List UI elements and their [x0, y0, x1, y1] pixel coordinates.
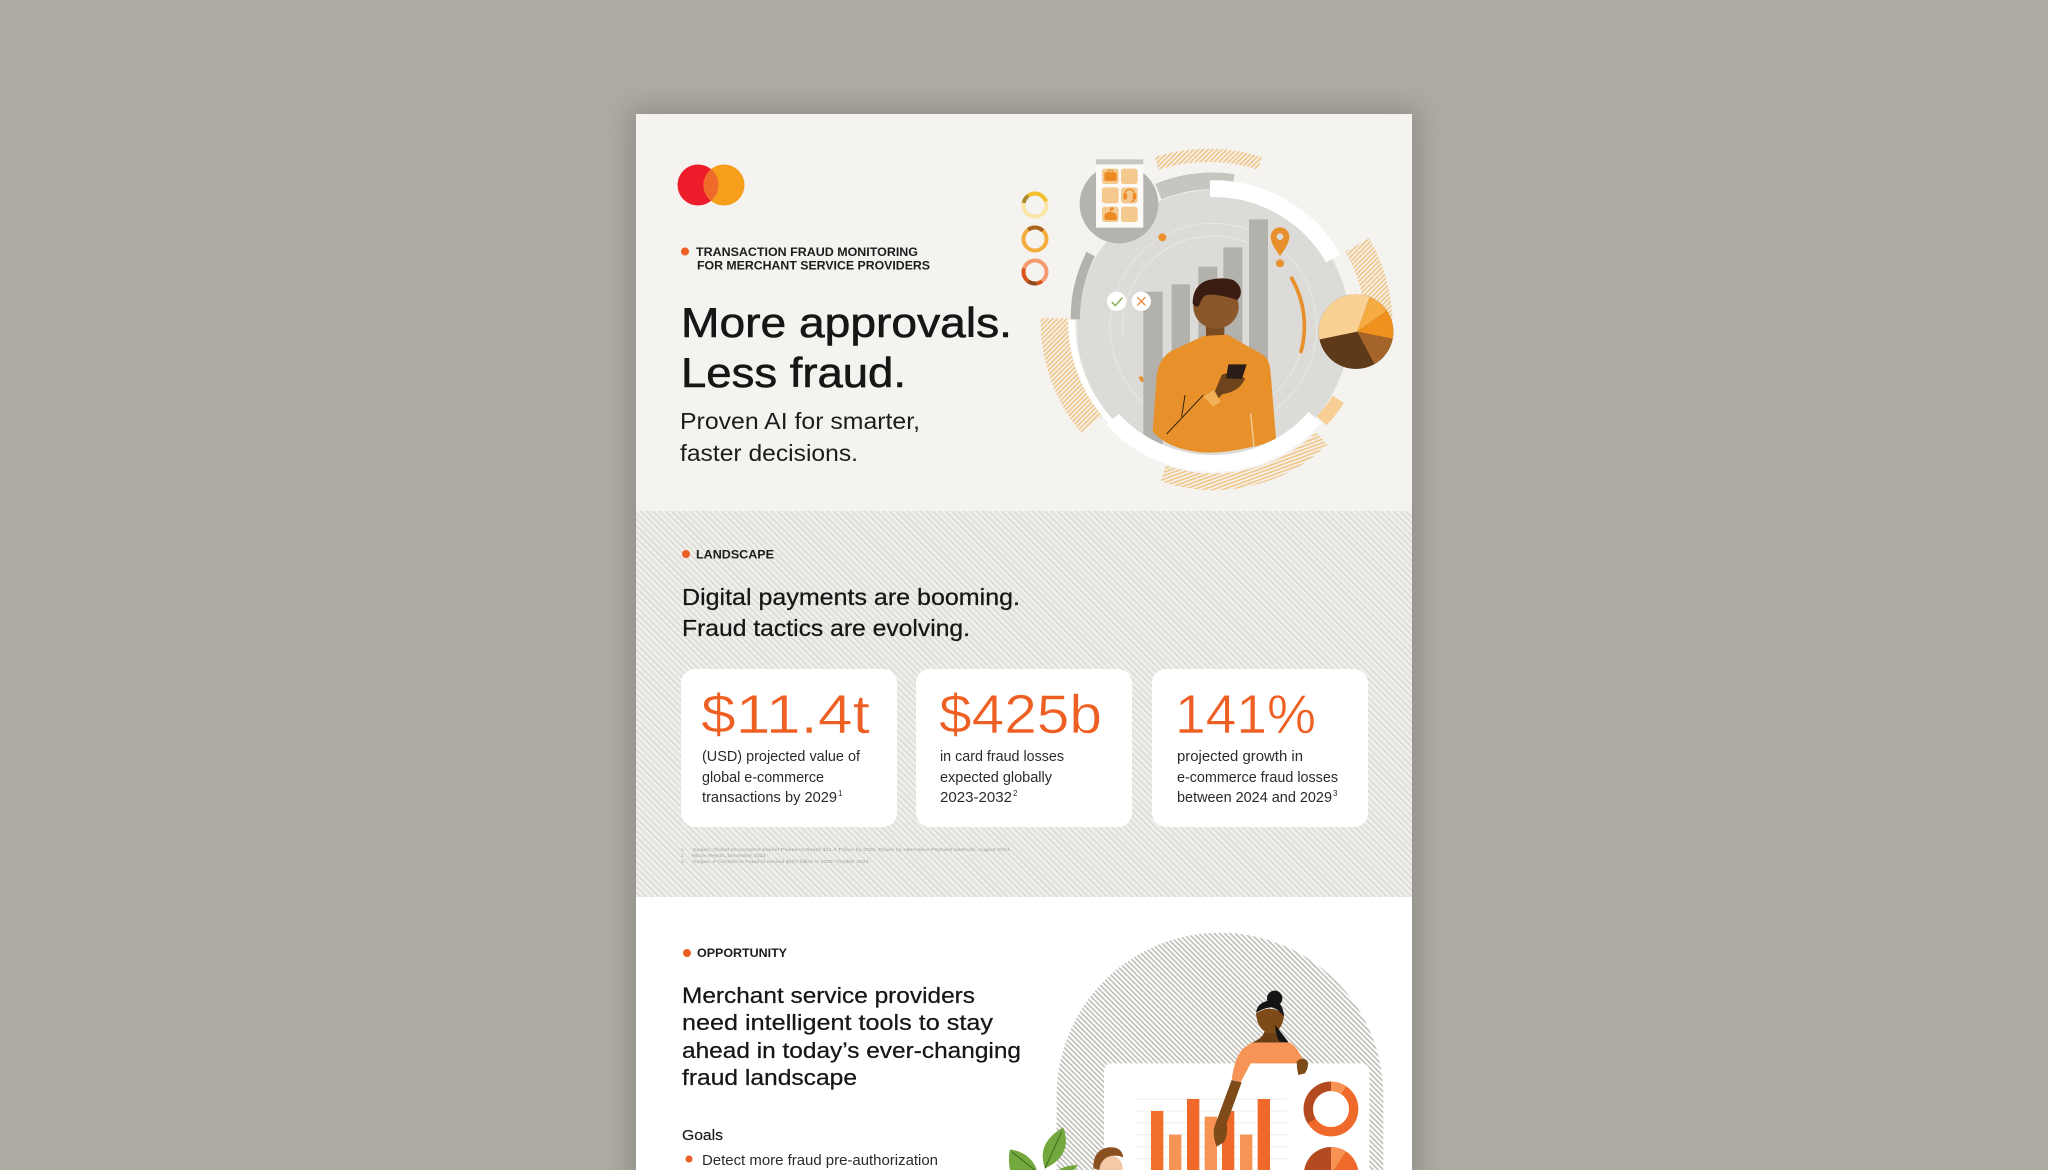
title: More approvals. [681, 299, 1012, 346]
heading: Merchant service providers [682, 983, 975, 1008]
pie [1318, 294, 1394, 369]
woman [1252, 1030, 1288, 1043]
subtitle: faster decisions. [680, 440, 858, 466]
illustration: analysts with dashboard [1009, 933, 1383, 1170]
stat card 2: $425b [939, 683, 1102, 745]
eyebrow text: FOR MERCHANT SERVICE PROVIDERS [697, 258, 930, 272]
white arcs [1113, 189, 1333, 463]
heading: need intelligent tools to stay [682, 1010, 993, 1035]
stat card 2 [916, 669, 1132, 827]
stat card 1: 1 [838, 789, 843, 798]
panel: landscape [636, 511, 1412, 897]
stat card 3: 141% [1175, 683, 1316, 745]
stat card 3 [1152, 669, 1368, 827]
illustration: person with charts [1054, 155, 1413, 482]
footnotes: Juniper, e-Commerce Fraud to exceed $107 billion in 2029, October 2024. [692, 859, 870, 864]
person [1206, 320, 1224, 340]
footnotes: 1. [681, 847, 685, 852]
footnotes: 2. [681, 853, 685, 858]
eyebrow text [681, 245, 930, 272]
hatched arcs [1054, 155, 1379, 482]
stat card 2: 2 [1013, 789, 1018, 798]
heading: ahead in today’s ever-changing [682, 1038, 1021, 1063]
paper shadow [630, 108, 1418, 1170]
stat card 2: 2023-2032 [940, 789, 1012, 806]
chart bars [1143, 219, 1268, 445]
subtitle [680, 408, 920, 466]
stat card 1 [681, 669, 897, 827]
title [681, 299, 1012, 396]
man [1099, 1156, 1123, 1170]
section label: opportunity: OPPORTUNITY [697, 948, 787, 960]
stat card 3: 3 [1333, 789, 1338, 798]
icon: progress rings [1024, 194, 1046, 284]
panel: hero [636, 114, 1413, 512]
panel: opportunity [636, 897, 1412, 1170]
stat card 3: e-commerce fraud losses [1177, 769, 1338, 786]
stat card 1: global e-commerce [702, 769, 824, 786]
footnotes [681, 847, 1011, 864]
title: Less fraud. [681, 349, 906, 396]
footnotes: 3. [681, 859, 685, 864]
goals: Detect more fraud pre-authorization [702, 1152, 938, 1169]
stat card 1: transactions by 2029 [702, 789, 837, 806]
goals [682, 1127, 938, 1169]
stat card 2: in card fraud losses [940, 748, 1064, 765]
goals: Goals [682, 1127, 723, 1144]
markers [1158, 233, 1166, 241]
footnotes: Juniper, Global eCommerce Market Poised to Reach $11.4 Trillion by 2029, Driven by Alternative Payment Methods, August 2024. [692, 847, 1011, 852]
heading: Fraud tactics are evolving. [682, 615, 970, 641]
heading: Digital payments are booming. [682, 584, 1020, 610]
heading [682, 983, 1021, 1090]
stat card 2: expected globally [940, 769, 1052, 786]
eyebrow text: TRANSACTION FRAUD MONITORING [696, 245, 918, 259]
plant [1043, 1127, 1066, 1168]
main disc [1077, 190, 1350, 463]
stat card 3: projected growth in [1177, 748, 1303, 765]
section label: landscape: LANDSCAPE [696, 550, 774, 562]
icon: logo [678, 164, 744, 206]
stat card 1: $11.4t [701, 683, 870, 745]
footnotes: Nilson Report, December 2023. [692, 853, 767, 858]
heading: fraud landscape [682, 1065, 857, 1090]
stat card 3: between 2024 and 2029 [1177, 789, 1332, 806]
tablet disc [1080, 165, 1158, 243]
subtitle: Proven AI for smarter, [680, 408, 920, 434]
stat card 1: (USD) projected value of [702, 748, 861, 765]
heading [682, 584, 1020, 641]
